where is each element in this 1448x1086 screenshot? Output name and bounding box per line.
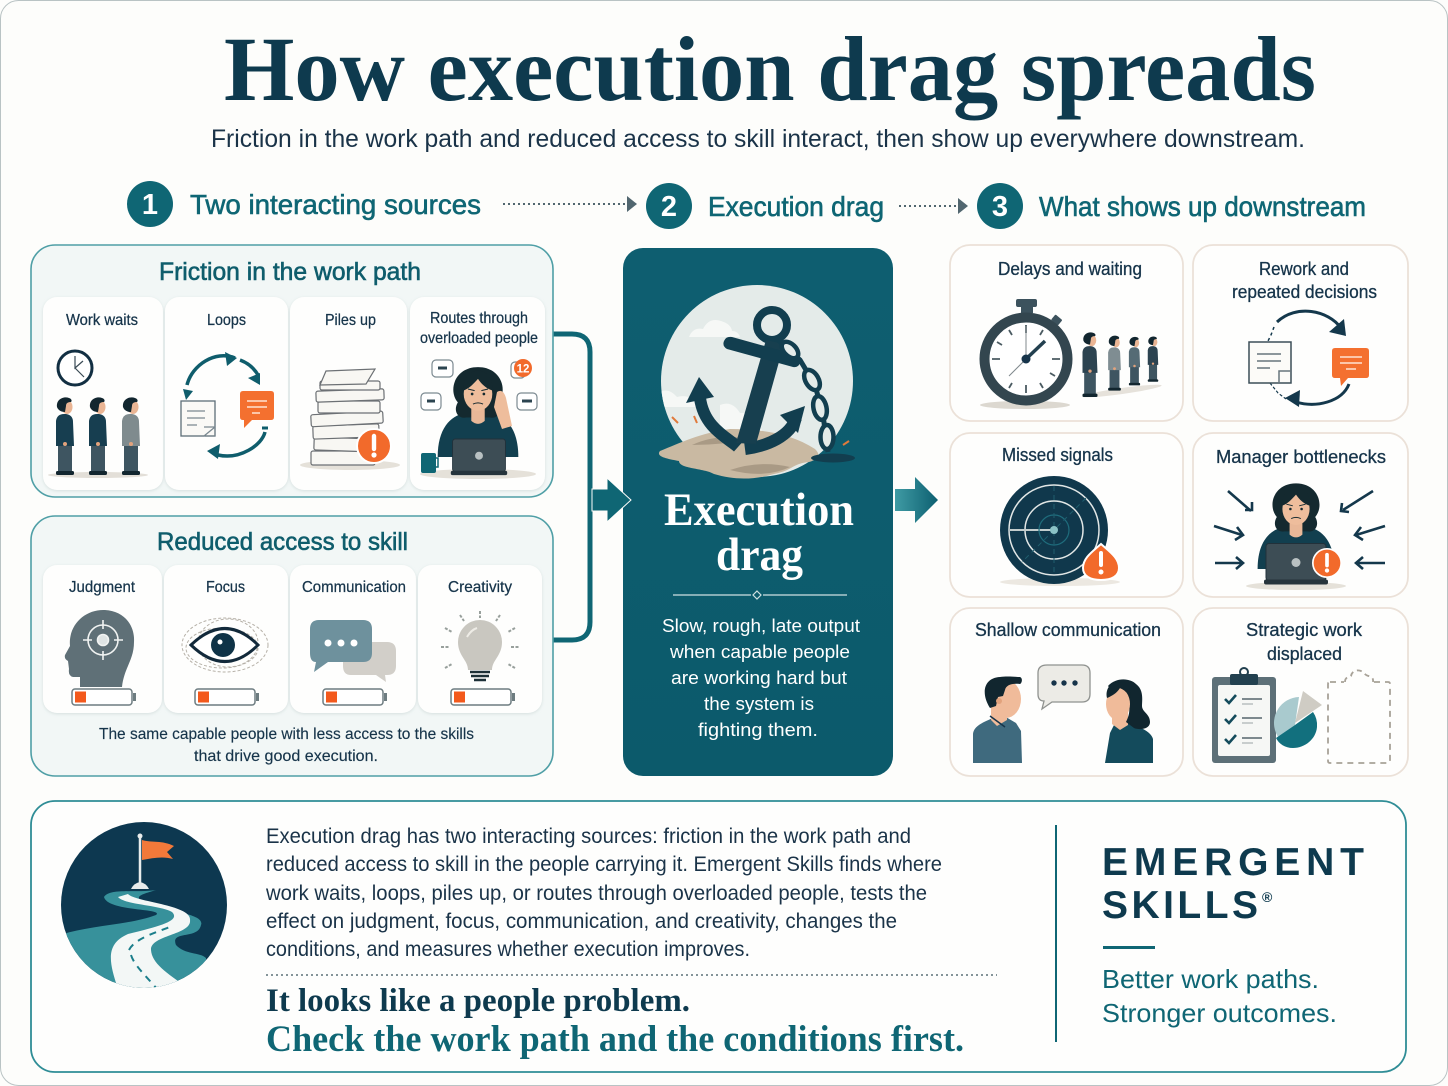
card: creativity [418, 565, 542, 713]
step 1 header: 1 [142, 189, 158, 221]
card: creativity: Creativity [448, 579, 512, 596]
card: work waits [43, 297, 163, 490]
description [662, 615, 860, 740]
card: loops: Loops [207, 312, 246, 329]
card: missed signals: Missed signals [1002, 445, 1113, 465]
card: delays and waiting [950, 245, 1183, 421]
card: loops [165, 297, 288, 490]
step 3 header [977, 183, 1366, 229]
vertical rule [1055, 825, 1057, 1042]
heading: reduced access: Reduced access to skill [157, 528, 408, 556]
card: focus [164, 565, 288, 713]
card: manager bottlenecks: Manager bottlenecks [1216, 447, 1386, 467]
icon: anchor stuck in sand [655, 285, 855, 478]
card: piles up: Piles up [325, 312, 376, 329]
summary text: conditions, and measures whether execution improves. [266, 938, 750, 961]
card: communication: Communication [302, 579, 406, 596]
description: are working hard but [671, 667, 847, 688]
card: piles up [290, 297, 407, 490]
step 2 header [646, 183, 884, 229]
arrow: sources into execution drag [592, 478, 631, 522]
takeaway: It looks like a people problem. [266, 983, 690, 1019]
logo: emergent skills: EMERGENT [1102, 841, 1364, 884]
logo: emergent skills: ® [1262, 889, 1273, 905]
logo: emergent skills: SKILLS [1102, 884, 1258, 927]
step 1 header: Two interacting sources [190, 189, 481, 220]
logo: emergent skills: Stronger outcomes. [1102, 998, 1337, 1028]
description: Slow, rough, late output [662, 615, 860, 636]
card: shallow communication [950, 608, 1183, 776]
card: communication [290, 565, 416, 713]
card: routes through overloaded people [410, 297, 545, 490]
step 3 header: What shows up downstream [1039, 191, 1366, 222]
panel: execution drag [623, 248, 893, 776]
step 3 header: 3 [992, 191, 1008, 223]
card: shallow communication: Shallow communication [975, 620, 1161, 640]
heading: friction: Friction in the work path [159, 258, 421, 286]
connector bracket [553, 334, 590, 640]
card: strategic work displaced [1193, 608, 1408, 776]
caption [99, 726, 474, 765]
title: execution drag: Execution [664, 484, 854, 536]
panel: friction in the work path [31, 245, 553, 497]
description: fighting them. [698, 719, 818, 740]
divider [673, 591, 847, 599]
summary text [265, 825, 942, 961]
caption: that drive good execution. [194, 748, 378, 765]
card: delays and waiting: Delays and waiting [998, 259, 1142, 279]
subtitle: Friction in the work path and reduced access to skill interact, then show up everywhere downstream. [211, 125, 1305, 153]
summary text: Execution drag has two interacting sources: friction in the work path and [266, 825, 911, 848]
dotted divider [266, 974, 997, 976]
summary text: reduced access to skill in the people carrying it. Emergent Skills finds where [266, 853, 942, 876]
icon: winding road with flag [60, 822, 227, 1000]
arrow: step 1 to step 2 [503, 196, 637, 212]
logo: emergent skills [1102, 841, 1364, 1028]
arrow: step 2 to step 3 [899, 198, 968, 214]
card: strategic work displaced: displaced [1267, 644, 1342, 664]
card: strategic work displaced: Strategic work [1246, 620, 1363, 640]
step 2 header: Execution drag [708, 191, 884, 222]
arrow: execution drag to downstream [895, 477, 938, 523]
logo: emergent skills: Better work paths. [1102, 964, 1319, 994]
title: execution drag: drag [716, 529, 803, 581]
summary text: work waits, loops, piles up, or routes through overloaded people, tests the [265, 882, 927, 905]
card: routes through overloaded people: Routes through [430, 310, 528, 327]
card: rework and repeated decisions [1193, 245, 1408, 421]
card: judgment [43, 565, 162, 713]
step 1 header [127, 181, 481, 227]
title: How execution drag spreads [224, 18, 1316, 120]
card: focus: Focus [206, 579, 245, 596]
takeaway: Check the work path and the conditions first. [266, 1019, 964, 1060]
card: rework and repeated decisions: Rework and [1259, 259, 1349, 279]
caption: The same capable people with less access to the skills [99, 726, 474, 743]
panel: summary [31, 801, 1406, 1072]
card: work waits: Work waits [66, 312, 138, 329]
summary text: effect on judgment, focus, communication, and creativity, changes the [266, 910, 897, 933]
step 2 header: 2 [661, 191, 677, 223]
card: routes through overloaded people: 12 [517, 364, 529, 376]
description: the system is [704, 693, 814, 714]
description: when capable people [669, 641, 850, 662]
card: judgment: Judgment [69, 579, 136, 596]
card: manager bottlenecks [1193, 433, 1408, 597]
panel: reduced access to skill [31, 516, 553, 776]
card: rework and repeated decisions: repeated decisions [1232, 282, 1377, 302]
card: missed signals [950, 433, 1183, 597]
card: routes through overloaded people: overloaded people [420, 330, 538, 347]
takeaway [266, 983, 964, 1060]
title: execution drag [664, 484, 854, 581]
